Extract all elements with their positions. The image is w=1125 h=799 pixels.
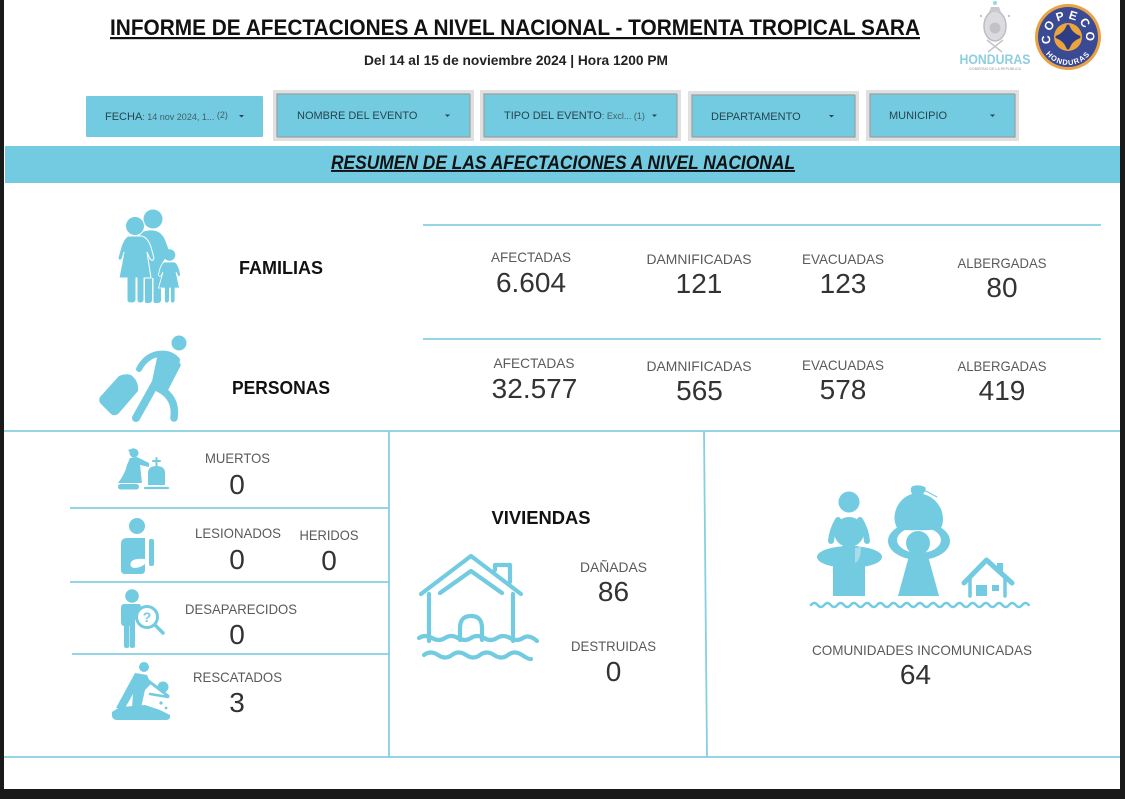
filter: fecha: FECHA: 14 nov 2024, 1... — [105, 111, 214, 123]
stat: lesionados: LESIONADOS — [195, 525, 281, 541]
stat: desaparecidos — [185, 601, 297, 650]
icon: person with suitcase — [99, 336, 186, 418]
logo: COPECO: COPECO — [1042, 10, 1094, 44]
stat: lesionados: 0 — [229, 544, 245, 575]
stat: familias evacuadas — [802, 251, 884, 299]
stat: familias afectadas — [491, 249, 571, 298]
stat: lesionados — [195, 525, 281, 575]
filter: nombre del evento — [273, 90, 474, 141]
stat: familias albergadas: 80 — [986, 272, 1018, 303]
icon: missing person search — [121, 589, 163, 648]
filter: nombre del evento: NOMBRE DEL EVENTO — [297, 110, 418, 122]
filter: municipio — [866, 90, 1019, 141]
stat: familias damnificadas: 121 — [676, 268, 722, 299]
stat: personas evacuadas: 578 — [820, 374, 866, 405]
icon: isolated community in flood — [811, 485, 1029, 607]
stat: familias albergadas: ALBERGADAS — [958, 255, 1046, 271]
stat: familias evacuadas: 123 — [820, 268, 866, 299]
stat: familias evacuadas: EVACUADAS — [802, 251, 884, 267]
filter: fecha — [86, 96, 263, 137]
stat: personas damnificadas — [646, 358, 752, 406]
icon: flooded house — [419, 556, 537, 659]
stat: personas albergadas: ALBERGADAS — [958, 358, 1046, 374]
stat: comunidades incomunicadas — [812, 642, 1032, 690]
stat: viviendas destruidas: 0 — [606, 656, 621, 687]
stat: personas damnificadas: DAMNIFICADAS — [646, 358, 752, 374]
stat: comunidades incomunicadas: COMUNIDADES INCOMUNICADAS — [812, 642, 1032, 658]
stat: viviendas dañadas: 86 — [598, 576, 629, 607]
stat: viviendas dañadas: DAÑADAS — [580, 559, 647, 575]
stat: rescatados — [193, 669, 282, 718]
filter: tipo del evento — [480, 90, 681, 141]
stat: rescatados: 3 — [229, 687, 245, 718]
logo: COPECO — [1035, 4, 1101, 70]
stat: personas afectadas: AFECTADAS — [494, 355, 574, 371]
label: personas: PERSONAS — [232, 378, 330, 398]
icon: missing person search: ? — [143, 609, 151, 625]
icon: rescuer digging — [112, 662, 170, 720]
stat: muertos — [205, 450, 270, 500]
icon: injured person — [121, 518, 154, 574]
heading: viviendas: VIVIENDAS — [492, 508, 590, 528]
stat: viviendas destruidas — [571, 638, 656, 687]
logo: Honduras: GOBIERNO DE LA REPÚBLICA — [969, 67, 1022, 71]
title: INFORME DE AFECTACIONES A NIVEL NACIONAL - TORMENTA TROPICAL SARA — [110, 15, 920, 40]
icon: family — [118, 210, 180, 303]
logo: Honduras — [960, 1, 1030, 71]
stat: familias albergadas — [958, 255, 1046, 303]
stat: viviendas dañadas — [580, 559, 647, 607]
stat: familias afectadas: 6.604 — [496, 267, 566, 298]
stat: comunidades incomunicadas: 64 — [900, 659, 931, 690]
stat: desaparecidos: DESAPARECIDOS — [185, 601, 297, 617]
stat: personas afectadas — [492, 355, 577, 404]
stat: heridos: HERIDOS — [300, 527, 358, 543]
stat: rescatados: RESCATADOS — [193, 669, 282, 685]
stat: familias damnificadas: DAMNIFICADAS — [646, 251, 752, 267]
stat: familias damnificadas — [646, 251, 752, 299]
stat: heridos — [300, 527, 358, 576]
stat: personas albergadas: 419 — [979, 375, 1025, 406]
stat: muertos: 0 — [229, 469, 245, 500]
icon: mourner at grave — [118, 448, 168, 490]
label: familias: FAMILIAS — [239, 258, 323, 278]
logo: COPECO: HONDURAS — [1046, 50, 1089, 65]
stat: personas evacuadas — [802, 357, 884, 405]
subtitle: date and time: Del 14 al 15 de noviembre 2024 | Hora 1200 PM — [364, 52, 668, 68]
section banner: RESUMEN DE LAS AFECTACIONES A NIVEL NACIONAL — [331, 153, 795, 174]
stat: muertos: MUERTOS — [205, 450, 270, 466]
section banner — [5, 146, 1120, 183]
filter: tipo del evento: TIPO DEL EVENTO: Excl... (1) — [504, 110, 645, 122]
filter: municipio: MUNICIPIO — [889, 110, 948, 122]
stat: heridos: 0 — [321, 545, 337, 576]
logo: Honduras: HONDURAS — [960, 52, 1030, 67]
stat: desaparecidos: 0 — [229, 619, 245, 650]
filter: fecha: (2) — [214, 110, 228, 120]
stat: personas damnificadas: 565 — [676, 375, 723, 406]
filter: departamento — [688, 91, 859, 141]
filter: departamento: DEPARTAMENTO — [711, 111, 801, 123]
stat: personas evacuadas: EVACUADAS — [802, 357, 884, 373]
stat: personas albergadas — [958, 358, 1046, 406]
stat: familias afectadas: AFECTADAS — [491, 249, 571, 265]
stat: personas afectadas: 32.577 — [492, 373, 577, 404]
stat: viviendas destruidas: DESTRUIDAS — [571, 638, 656, 654]
